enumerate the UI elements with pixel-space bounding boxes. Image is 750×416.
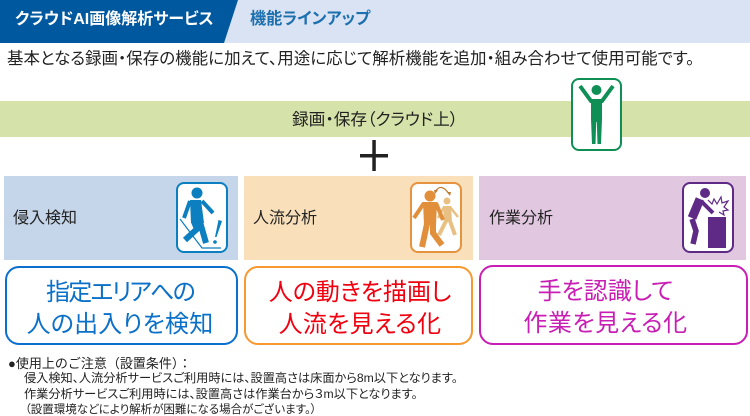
usage notes: 作業分析サービスご利用時には、設置高さは作業台から３m以下となります。 xyxy=(24,387,418,401)
recording bar xyxy=(0,101,750,137)
icon: two walking people xyxy=(410,182,462,253)
usage notes: 侵入検知、人流分析サービスご利用時には、設置高さは床面から8m以下となります。 xyxy=(24,371,458,385)
callout: people flow xyxy=(244,266,473,345)
icon: standing person xyxy=(571,78,622,151)
label: work analysis: 作業分析 xyxy=(489,210,553,227)
usage notes xyxy=(8,356,458,416)
callout: work visualization: 手を認識して xyxy=(538,278,673,305)
header banner: クラウドAI画像解析サービス xyxy=(15,9,214,28)
header banner: 機能ラインアップ xyxy=(250,9,371,28)
label: intrusion detection: 侵入検知 xyxy=(13,210,77,227)
callout: work visualization: 作業を見える化 xyxy=(523,310,688,337)
usage notes: ●使用上のご注意（設置条件）： xyxy=(8,356,191,370)
panel: intrusion detection xyxy=(4,176,238,260)
intro text: 基本となる録画・保存の機能に加えて、用途に応じて解析機能を追加・組み合わせて使用可能です。 xyxy=(7,50,694,68)
usage notes: （設置環境などにより解析が困難になる場合がございます。） xyxy=(25,404,316,416)
panel: people flow analysis xyxy=(244,176,473,260)
callout: intrusion detection: 指定エリアへの xyxy=(46,279,194,306)
callout: people flow: 人流を見える化 xyxy=(279,311,441,338)
callout: intrusion detection xyxy=(5,266,238,345)
recording label: 録画・保存（クラウド上） xyxy=(292,110,458,129)
callout: intrusion detection: 人の出入りを検知 xyxy=(27,311,213,338)
callout: work visualization xyxy=(479,265,748,345)
plus sign xyxy=(360,140,388,171)
panel: work analysis xyxy=(479,176,746,260)
icon: person crossing line xyxy=(176,182,228,253)
icon: person at workbench xyxy=(682,182,734,253)
label: people flow analysis: 人流分析 xyxy=(253,210,317,227)
callout: people flow: 人の動きを描画し xyxy=(269,279,451,306)
header banner xyxy=(0,0,750,43)
